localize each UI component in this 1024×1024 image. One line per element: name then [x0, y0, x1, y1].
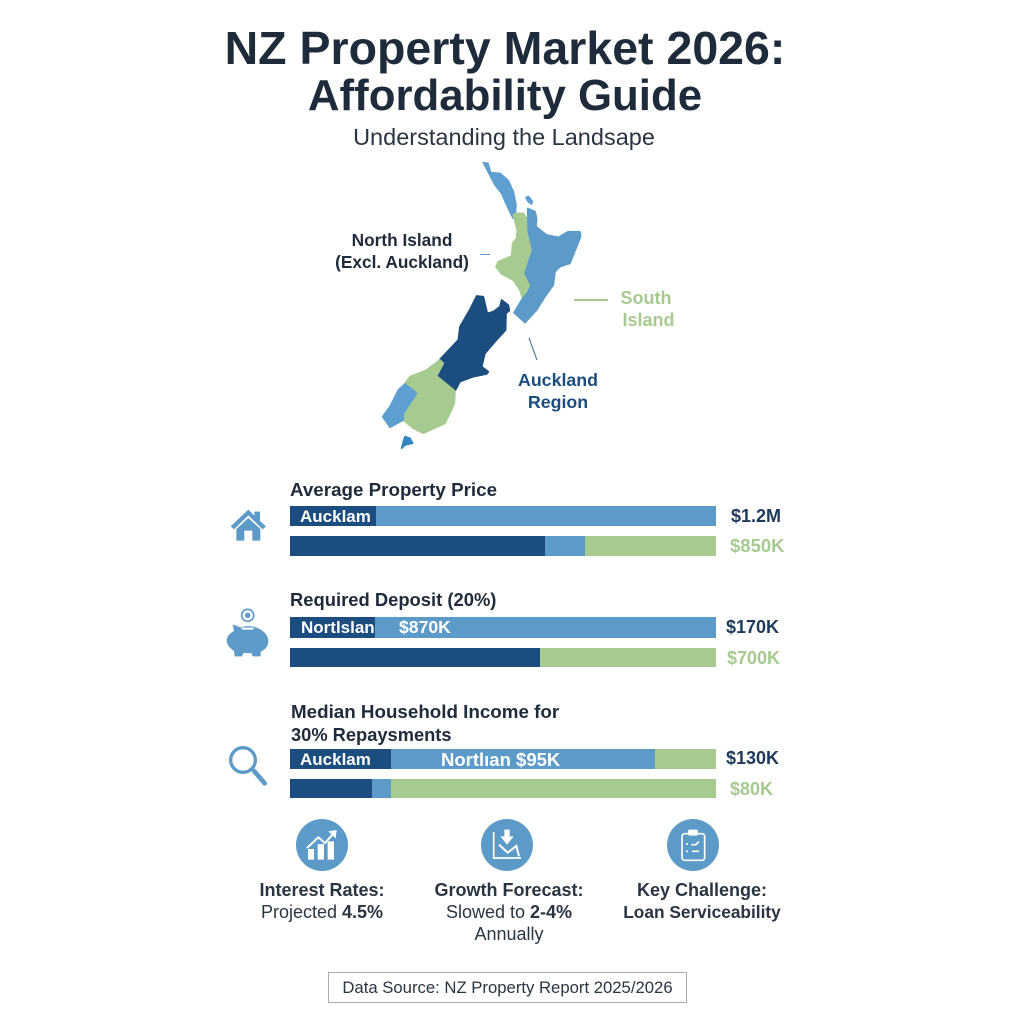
value: $130K: $130K	[726, 748, 779, 768]
bar: top row: Nortlıan $95K	[441, 749, 560, 770]
text: Interest Rates: Interest Rates:	[259, 880, 385, 900]
icon: clipboard checklist	[667, 819, 719, 871]
stat: Interest Rates	[259, 819, 385, 922]
text: Growth Forecast: Annually	[474, 924, 544, 944]
bar: bottom row	[290, 648, 716, 667]
map region: lower South Island	[403, 360, 455, 433]
bar: top row	[290, 506, 716, 526]
section: Required Deposit	[226, 589, 780, 668]
map region: Northland	[483, 163, 516, 218]
section: Average Property Price	[230, 479, 785, 556]
map label: South Island	[620, 288, 675, 330]
subtitle: Understanding the Landsape	[353, 124, 655, 150]
map label: South Island: South	[620, 288, 671, 308]
value: $80K: $80K	[730, 779, 773, 799]
map region: upper South Island	[437, 296, 509, 391]
map label: Auckland Region: Region	[528, 392, 588, 412]
title: Affordability Guide	[308, 71, 702, 120]
map region: Stewart Island	[402, 437, 413, 448]
text: Key Challenge: Loan Serviceability	[623, 902, 781, 922]
heading: Median Household Income	[291, 701, 559, 745]
bar: top row: Aucklam	[300, 507, 371, 526]
text: Growth Forecast: Growth Forecast:	[434, 880, 584, 900]
text: Growth Forecast: Slowed to 2-4%	[446, 902, 572, 922]
map region: Fiordland	[383, 384, 417, 427]
map label: Auckland Region: Auckland	[518, 370, 598, 390]
stat: Key Challenge	[623, 819, 781, 922]
text: Growth Forecast	[434, 880, 584, 944]
leader line: North Island	[480, 254, 490, 255]
bar: top row	[290, 617, 716, 638]
bar: top row: $870K	[399, 617, 451, 637]
text: Interest Rates	[259, 880, 385, 922]
map label: Auckland Region	[518, 370, 598, 412]
icon: rising chart	[296, 819, 348, 871]
data source box	[328, 972, 687, 1003]
icon: download chart	[481, 819, 533, 871]
leader line: South Island	[574, 299, 608, 300]
bar: bottom row	[290, 536, 716, 556]
section: Median Household Income	[229, 701, 779, 799]
text: Key Challenge	[623, 880, 781, 922]
heading: Median Household Income: 30% Repaysments	[291, 724, 452, 745]
value: $850K: $850K	[730, 535, 785, 556]
bar: top row: Aucklam	[300, 750, 371, 769]
text: Interest Rates: Projected 4.5%	[261, 902, 383, 922]
heading: Median Household Income: Median Household Income for	[291, 701, 559, 722]
map: New Zealand regions	[382, 162, 582, 450]
stat: Growth Forecast	[434, 819, 584, 944]
heading: Required Deposit: Required Deposit (20%)	[290, 589, 496, 610]
map label: North Island: (Excl. Auckland)	[335, 252, 469, 272]
title: NZ Property Market 2026:	[225, 22, 785, 74]
icon: house	[230, 510, 266, 541]
map region: eastern North Island	[514, 208, 581, 323]
map label: South Island: Island	[622, 310, 675, 330]
bar: top row: Nortlslan	[301, 618, 375, 637]
value: $170K: $170K	[726, 617, 779, 637]
heading: Average Property Price: Average Property Price	[290, 479, 497, 500]
data source box: Data Source: NZ Property Report 2025/2026	[342, 978, 673, 997]
value: $700K: $700K	[727, 648, 780, 668]
title	[225, 22, 785, 120]
text: Key Challenge: Key Challenge:	[637, 880, 767, 900]
map label: North Island: North Island	[352, 230, 452, 250]
map region: Coromandel islet	[526, 197, 532, 204]
bar: top row	[290, 749, 716, 770]
value: $1.2M: $1.2M	[731, 506, 781, 526]
map region: western North Island	[496, 213, 533, 298]
icon: piggy bank	[226, 608, 268, 656]
icon: magnifying glass	[229, 746, 267, 786]
bar: bottom row	[290, 779, 716, 798]
map label: North Island	[335, 230, 469, 272]
leader line: Auckland	[528, 338, 538, 360]
